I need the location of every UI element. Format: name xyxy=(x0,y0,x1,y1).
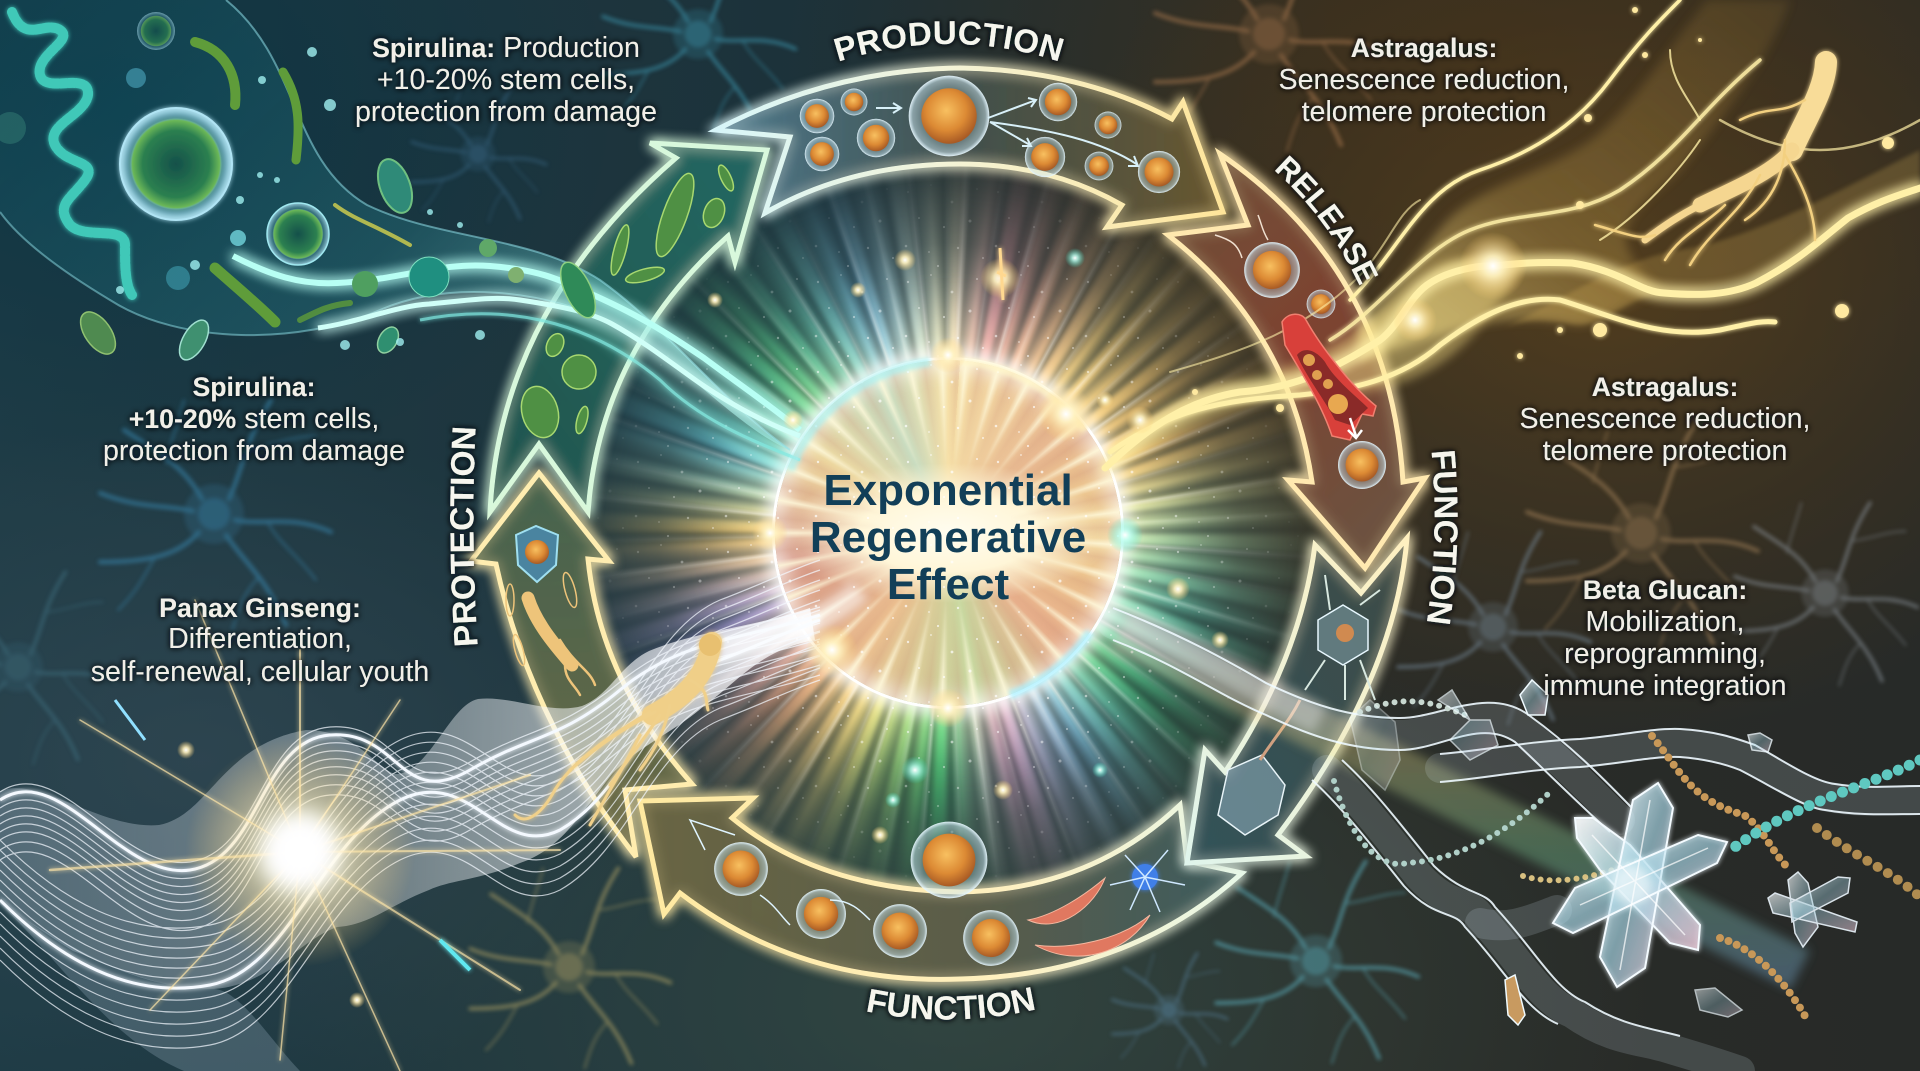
shield with cell xyxy=(516,526,558,582)
spirulina spiral chain xyxy=(12,12,132,295)
icon: blue nerve cell xyxy=(1110,850,1185,912)
sphere inner rays xyxy=(775,360,1121,706)
arrow: production xyxy=(716,68,1223,227)
callout: beta glucan xyxy=(1543,575,1787,702)
callout: spirulina production: protection from damage xyxy=(355,96,657,128)
icon: blood vessel xyxy=(1282,314,1376,440)
icon: muscle fibres xyxy=(1028,878,1150,956)
arrow labels: PROTECTION xyxy=(446,424,481,649)
crystals along ribbon xyxy=(1350,680,1772,1025)
green bacteria rods xyxy=(74,42,602,365)
central glowing sphere xyxy=(775,360,1121,706)
callout: panax ginseng: Panax Ginseng: xyxy=(159,593,361,623)
crystal asterisk small xyxy=(1768,872,1857,947)
central white rays xyxy=(605,184,1292,874)
crystal beta-glucan ribbons xyxy=(1105,608,1920,1071)
central radial burst xyxy=(582,168,1338,884)
callout: astragalus top xyxy=(1279,33,1569,128)
molecular chains xyxy=(1334,701,1920,1016)
callout: panax ginseng: self-renewal, cellular youth xyxy=(91,656,429,688)
arrow labels: RELEASE xyxy=(1273,153,1381,289)
callout: astragalus top: telomere protection xyxy=(1302,96,1546,128)
callout: spirulina stem cells: +10-20% stem cells, xyxy=(129,403,379,435)
arrow: protection gold xyxy=(471,473,692,857)
rim highlights on sphere xyxy=(752,337,1143,728)
yellow band crossing release arrow xyxy=(1105,259,1520,470)
center title: Exponential xyxy=(823,466,1073,515)
crystal asterisk large xyxy=(1553,783,1727,987)
callout: spirulina stem cells: Spirulina: xyxy=(192,372,316,402)
callout: beta glucan: Mobilization, xyxy=(1586,606,1744,638)
gold astragalus ribbon xyxy=(1105,0,1920,470)
callout: panax ginseng: Differentiation, xyxy=(168,623,352,655)
arrow: release xyxy=(1168,154,1425,568)
sparkle particles xyxy=(707,248,1229,844)
arrow labels: FUNCTION xyxy=(864,984,1038,1024)
callout: astragalus lower: Senescence reduction, xyxy=(1520,403,1810,435)
ginseng root over ribbon xyxy=(515,634,721,825)
callout: beta glucan: immune integration xyxy=(1543,670,1787,702)
arrow: function bottom xyxy=(640,798,1242,979)
callout: beta glucan: reprogramming, xyxy=(1564,638,1766,670)
center title: Regenerative xyxy=(810,513,1086,562)
teal spirulina ribbon xyxy=(0,0,800,470)
small bubbles xyxy=(116,47,485,350)
white ginseng mesh ribbon xyxy=(0,560,860,1071)
callout: astragalus top: Senescence reduction, xyxy=(1279,64,1569,96)
callout: spirulina production: +10-20% stem cells, xyxy=(377,64,635,96)
bottom-left starburst xyxy=(50,600,560,1071)
rainbow light beam xyxy=(1120,630,1800,970)
arrow: function right xyxy=(1187,538,1407,863)
callout: astragalus lower: Astragalus: xyxy=(1592,372,1738,402)
callout: beta glucan: Beta Glucan: xyxy=(1583,575,1747,605)
callout: spirulina production xyxy=(355,32,657,128)
callout: astragalus top: Astragalus: xyxy=(1351,33,1497,63)
callout: panax ginseng xyxy=(91,593,429,688)
callout: spirulina stem cells xyxy=(103,372,405,467)
gold bubbles xyxy=(1192,7,1894,412)
callout: astragalus lower xyxy=(1520,372,1810,467)
cycle arrows xyxy=(471,68,1425,979)
arrow labels xyxy=(446,18,1462,1024)
center title xyxy=(810,466,1086,609)
center title: Effect xyxy=(887,560,1009,609)
arrow labels: PRODUCTION xyxy=(831,18,1066,64)
callout: spirulina production: Spirulina: Production xyxy=(372,32,640,64)
callout: astragalus lower: telomere protection xyxy=(1543,435,1787,467)
callouts xyxy=(91,32,1810,702)
callout: spirulina stem cells: protection from damage xyxy=(103,435,405,467)
arrow labels: FUNCTION xyxy=(1424,448,1462,627)
arrow: protection green xyxy=(490,143,767,512)
ginseng root on gold ribbon xyxy=(1595,62,1826,265)
large green cell xyxy=(120,108,232,220)
sparkle dust around sphere xyxy=(588,173,1308,893)
